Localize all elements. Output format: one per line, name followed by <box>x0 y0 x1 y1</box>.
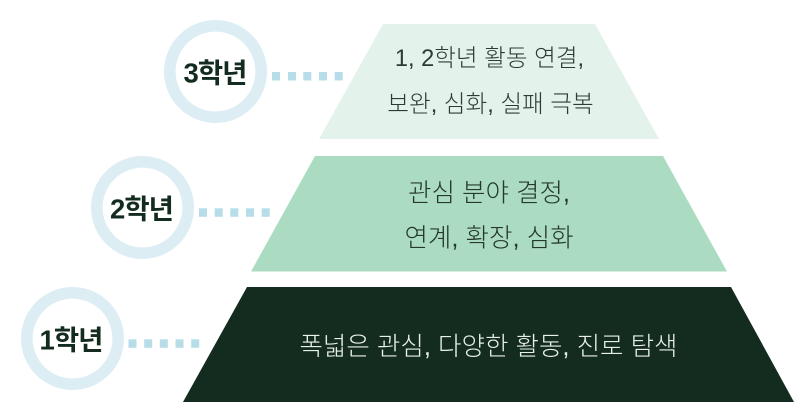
badge: grade 1 <box>27 293 118 384</box>
badge: grade 1: 1학년 <box>40 324 102 356</box>
connector: grade 1 dotted line <box>128 339 199 348</box>
text: grade 2 description: 관심 분야 결정, <box>408 180 570 208</box>
panel: grade 1 pyramid tier <box>183 287 794 402</box>
connector: grade 2 dotted line <box>199 208 270 217</box>
badge: grade 2: 2학년 <box>110 194 173 224</box>
panel: grade 3 pyramid tier <box>319 24 659 139</box>
connector: grade 3 dotted line <box>272 72 343 80</box>
text: grade 1 description: 폭넓은 관심, 다양한 활동, 진로 탐색 <box>299 333 678 361</box>
badge: grade 2 <box>97 162 188 253</box>
panel: grade 2 pyramid tier <box>251 156 727 272</box>
badge: grade 3: 3학년 <box>184 58 246 88</box>
badge: grade 3 <box>170 26 261 117</box>
text: grade 3 description <box>387 45 594 118</box>
text: grade 2 description: 연계, 확장, 심화 <box>404 224 574 252</box>
text: grade 2 description <box>404 180 574 252</box>
text: grade 3 description: 보완, 심화, 실패 극복 <box>387 91 594 118</box>
text: grade 3 description: 1, 2학년 활동 연결, <box>395 45 584 72</box>
